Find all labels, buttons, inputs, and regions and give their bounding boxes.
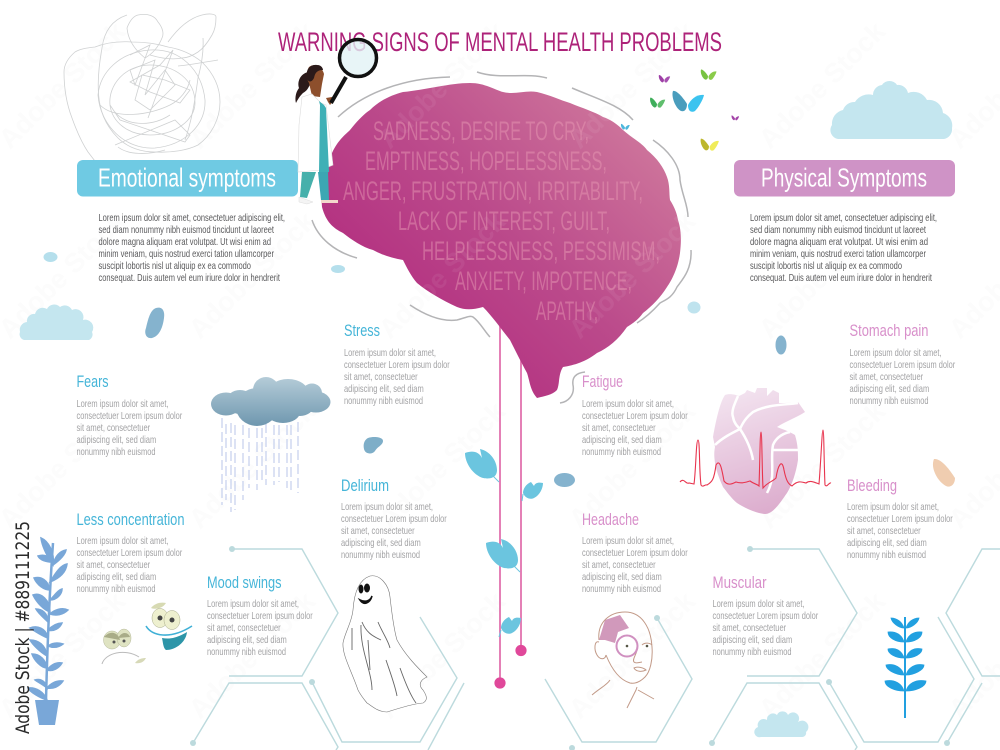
section: Mood swings: Mood swings [207,574,282,592]
section: Mood swings: nonummy nibh euismod [207,646,286,658]
icon: right blue plant [885,617,926,718]
physical symptoms text: minim veniam, quis nostrud exerci tation ullamcorper [750,248,926,260]
icon: mood faces [102,603,192,664]
section: Muscular [712,574,819,658]
section: Muscular: Muscular [712,574,767,592]
section: Headache [582,511,688,595]
brain text: emotional signs: ANXIETY, IMPOTENCE, [455,266,632,296]
section: Fatigue [582,373,688,458]
section: Fatigue: sit amet, consectetuer [582,422,656,434]
brain outline [312,72,691,403]
section: Stress: adipiscing elit, sed diam [344,383,424,395]
emotional symptoms text: minim veniam, quis nostrud exerci tation ullamcorper [98,248,274,260]
section: Muscular: adipiscing elit, sed diam [712,634,792,646]
section: Stress: nonummy nibh euismod [344,395,423,407]
section: Fatigue: consectetuer Lorem ipsum dolor [582,410,688,422]
section: Bleeding: Lorem ipsum dolor sit amet, [847,501,939,513]
section: Fears: adipiscing elit, sed diam [76,434,156,446]
section: Less concentration [76,511,184,595]
section: Headache: Lorem ipsum dolor sit amet, [582,535,674,547]
section: Less concentration: nonummy nibh euismod [76,583,156,595]
icon: left potted plant [28,538,68,725]
icon: doctor with magnifying glass [295,40,376,204]
section: Headache: consectetuer Lorem ipsum dolor [582,547,688,559]
section: Stress: sit amet, consectetuer [344,371,418,383]
section: Stomach pain: nonummy nibh euismod [850,395,929,407]
connector lines from brain [494,325,527,689]
brain text: emotional signs: ANGER, FRUSTRATION, IRRITABILITY, [343,176,643,206]
section: Less concentration: Lorem ipsum dolor sit amet, [76,535,168,547]
section: Stress [344,322,450,407]
section: Stomach pain: Stomach pain [850,322,928,340]
brain text: emotional signs [343,116,660,326]
title: WARNING SIGNS OF MENTAL HEALTH PROBLEMS [278,27,722,57]
section: Stomach pain: Lorem ipsum dolor sit amet, [850,347,942,359]
section: Stomach pain: adipiscing elit, sed diam [850,383,929,395]
brain shape [322,83,681,398]
section: Fatigue: nonummy nibh euismod [582,446,661,458]
section: Muscular: sit amet, consectetuer [712,622,787,634]
section: Stress: Stress [344,322,380,340]
happy face [146,603,192,650]
emotional symptoms text: Lorem ipsum dolor sit amet, consectetuer adipiscing elit, [98,212,285,224]
section: Delirium [341,477,447,561]
section: Stomach pain: sit amet, consectetuer [850,371,924,383]
physical symptoms text: dolore magna aliquam erat volutpat. Ut wisi enim ad [750,236,928,248]
icon: storm cloud with rain [211,377,330,512]
icon: blue leaves [465,449,543,637]
section: Headache: sit amet, consectetuer [582,559,656,571]
physical symptoms text: sed diam nonummy nibh euismod tincidunt ut laoreet [750,224,926,236]
brain text: emotional signs: HELPLESSNESS, PESSIMISM, [422,236,660,266]
brain text: emotional signs: LACK OF INTEREST, GUILT, [398,206,610,236]
icon: face with headache [592,612,654,708]
section: Stress: Lorem ipsum dolor sit amet, [344,347,436,359]
section: Muscular: Lorem ipsum dolor sit amet, [712,598,804,610]
section: Mood swings: sit amet, consectetuer [207,622,281,634]
emotional symptoms banner: Emotional symptoms [98,162,276,192]
section: Bleeding: Bleeding [847,477,897,495]
emotional symptoms text: suscipit lobortis nisl ut aliquip ex ea commodo [98,260,251,272]
physical symptoms text [750,212,937,284]
emotional symptoms text: consequat. Duis autem vel eum iriure dolor in hendrerit [98,272,280,284]
section: Stomach pain: consectetuer Lorem ipsum dolor [850,359,956,371]
emotional symptoms text [98,212,285,284]
section: Delirium: adipiscing elit, sed diam [341,537,421,549]
emotional symptoms text: dolore magna aliquam erat volutpat. Ut wisi enim ad [98,236,271,248]
emotional symptoms banner [77,160,298,196]
physical symptoms text: consequat. Duis autem vel eum iriure dolor in hendrerit [750,272,932,284]
icon: butterflies [621,69,739,151]
section: Bleeding: consectetuer Lorem ipsum dolor [847,513,953,525]
section: Delirium: consectetuer Lorem ipsum dolor [341,513,447,525]
section: Fears: Lorem ipsum dolor sit amet, [76,398,168,410]
section: Delirium: Lorem ipsum dolor sit amet, [341,501,433,513]
decorative blobs [44,252,955,487]
section: Fears: Fears [76,373,108,391]
brain graphic [312,72,691,403]
watermark stock id: Adobe Stock | #889111225 [12,521,34,734]
section: Delirium: sit amet, consectetuer [341,525,415,537]
section: Bleeding [847,477,953,561]
brain text: emotional signs: SADNESS, DESIRE TO CRY, [373,116,589,146]
section: Stomach pain [850,322,956,407]
section: Headache: adipiscing elit, sed diam [582,571,662,583]
section: Fears: sit amet, consectetuer [76,422,151,434]
section: Headache: Headache [582,511,639,529]
section: Bleeding: nonummy nibh euismod [847,549,926,561]
section: Bleeding: sit amet, consectetuer [847,525,921,537]
section: Bleeding: adipiscing elit, sed diam [847,537,927,549]
section: Less concentration: adipiscing elit, sed diam [76,571,156,583]
emotional symptoms text: sed diam nonummy nibh euismod tincidunt ut laoreet [98,224,274,236]
section: Mood swings: adipiscing elit, sed diam [207,634,287,646]
section: Fears: nonummy nibh euismod [76,446,156,458]
section: Fatigue: Fatigue [582,373,623,391]
sad face [102,629,146,664]
brain text: emotional signs: EMPTINESS, HOPELESSNESS, [365,146,607,176]
section: Mood swings: Lorem ipsum dolor sit amet, [207,598,299,610]
section: Stress: consectetuer Lorem ipsum dolor [344,359,450,371]
physical symptoms banner: Physical Symptoms [761,162,927,192]
section: Mood swings [207,574,313,658]
section: Muscular: consectetuer Lorem ipsum dolor [712,610,819,622]
physical symptoms banner [734,160,955,196]
icon: heart with ECG line [680,388,831,514]
section: Mood swings: consectetuer Lorem ipsum dolor [207,610,313,622]
hexagon network [190,546,1000,750]
section: Fatigue: adipiscing elit, sed diam [582,434,662,446]
section: Delirium: Delirium [341,477,389,495]
scribble [64,14,220,165]
section: Less concentration: sit amet, consectetuer [76,559,151,571]
section: Fatigue: Lorem ipsum dolor sit amet, [582,398,674,410]
section: Less concentration: Less concentration [76,511,184,529]
section: Less concentration: consectetuer Lorem ipsum dolor [76,547,183,559]
brain text: emotional signs: APATHY, [536,296,598,326]
section: Headache: nonummy nibh euismod [582,583,661,595]
section: Fears: consectetuer Lorem ipsum dolor [76,410,183,422]
section: Muscular: nonummy nibh euismod [712,646,792,658]
section: Delirium: nonummy nibh euismod [341,549,420,561]
physical symptoms text: suscipit lobortis nisl ut aliquip ex ea commodo [750,260,902,272]
section: Fears [76,373,183,458]
icon: ghost [343,576,427,712]
